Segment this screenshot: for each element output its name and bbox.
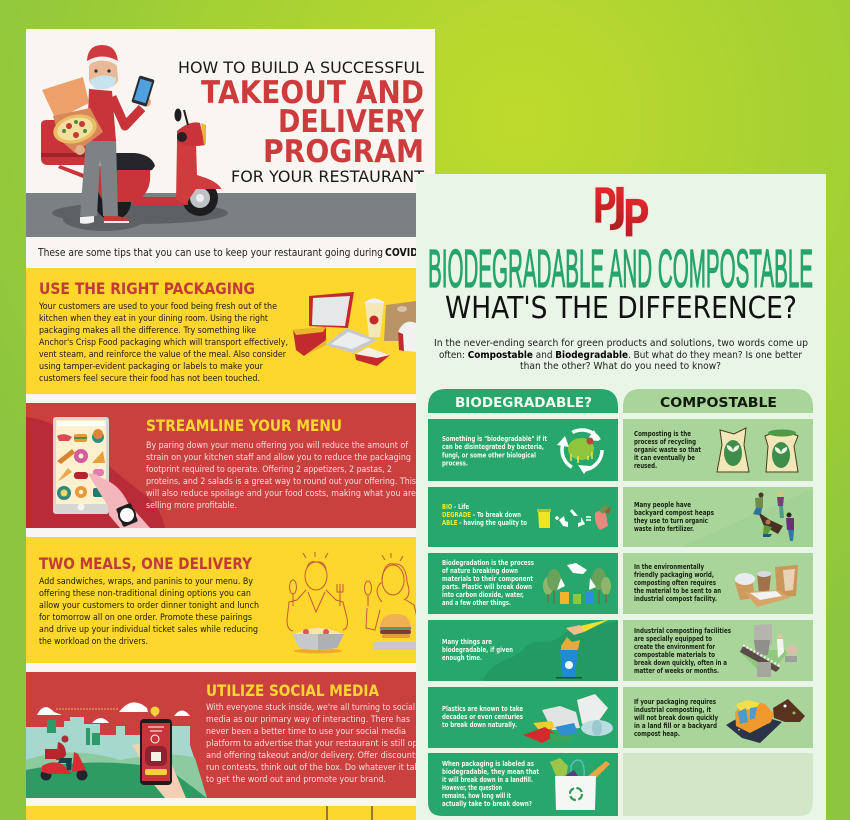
hand and phone xyxy=(132,719,186,798)
text: friendly packaging world, xyxy=(634,570,714,579)
text: decades or even centuries xyxy=(442,712,523,721)
body text: using tamper-evident packaging or labels to make your xyxy=(39,362,263,372)
body text xyxy=(38,302,288,384)
column header: compostable xyxy=(623,389,813,413)
body text: With everyone stuck inside, we're all turning to social xyxy=(206,703,415,713)
intro text: than the other? What do you need to know? xyxy=(520,361,721,372)
icon: reusable shopping bag xyxy=(550,758,610,810)
intro text: often: Compostable and Biodegradable. But what do they mean? Is one better xyxy=(439,350,803,361)
row: biodegradation process xyxy=(428,553,618,614)
title: takeout and delivery program: DELIVERY xyxy=(278,104,425,140)
text: actually take to break down? xyxy=(442,799,532,808)
text: and a few other things. xyxy=(442,598,511,607)
text: can be disintegrated by bacteria, xyxy=(442,442,544,451)
row: plastics xyxy=(428,687,618,748)
body text: Anchor's Crisp Food packaging which will transport effectively, xyxy=(39,338,288,348)
text: reused. xyxy=(634,461,657,470)
text xyxy=(442,704,523,729)
body text: offering these non-traditional dining options you can xyxy=(39,589,251,599)
text: process. xyxy=(442,458,468,468)
body text: By paring down your menu offering you will reduce the amount of xyxy=(146,441,409,451)
body text: for tomorrow all on one order. Promote these pairings xyxy=(39,613,252,623)
text: to break down naturally. xyxy=(442,720,517,729)
text xyxy=(634,562,721,603)
text: compostable materials to xyxy=(634,650,715,659)
body text xyxy=(206,703,428,785)
body text: will also reduce spoilage and your food costs, making what you are xyxy=(146,489,416,499)
row: bio degrade able xyxy=(428,487,618,547)
text: industrial composting, it xyxy=(634,705,711,714)
subtitle: WHAT'S THE DIFFERENCE? xyxy=(445,291,797,326)
body text: the workload on the drivers. xyxy=(39,637,148,647)
text: it will break down in a landfill. xyxy=(442,775,533,784)
body text: strain on your kitchen staff and allow you to reduce the packaging xyxy=(146,453,411,463)
text: they use to turn organic xyxy=(634,516,708,525)
text: However, the question xyxy=(442,783,502,792)
row: empty compost cell xyxy=(623,753,813,816)
text: Composting is the xyxy=(634,429,691,438)
icon: compost factory machinery xyxy=(738,624,798,677)
panel: next tip, cut off xyxy=(26,806,435,820)
body text: vent steam, and reinforce the value of the meal. Also consider xyxy=(39,350,286,360)
body text xyxy=(39,577,259,647)
text: process of recycling xyxy=(634,437,696,446)
rider scooter xyxy=(40,736,88,780)
text: are specially equipped to xyxy=(634,634,712,643)
text: will not break down quickly xyxy=(634,713,718,722)
icon: kraft packaging xyxy=(735,565,798,607)
text: parts. Plastic will break down xyxy=(442,582,532,591)
text: organic waste so that xyxy=(634,445,701,454)
icon: recycling blob xyxy=(557,430,602,474)
text: Many people have xyxy=(634,500,691,509)
body text: and drive up your individual ticket sales while reducing xyxy=(39,625,258,635)
text: If your packaging requires xyxy=(634,697,716,706)
logo: PJP: J xyxy=(609,178,628,233)
text xyxy=(442,434,547,468)
text: fungi, or some other biological xyxy=(442,450,536,460)
title: takeout and delivery program: FOR YOUR RESTAURANT xyxy=(231,167,424,186)
text xyxy=(634,429,701,470)
intro text: In the never-ending search for green products and solutions, two words come up xyxy=(434,338,808,349)
column header: biodegradable xyxy=(428,389,618,413)
panel: streamline your menu xyxy=(26,403,435,528)
title: takeout and delivery program: TAKEOUT AND xyxy=(201,75,424,111)
text: Plastics are known to take xyxy=(442,704,523,713)
text xyxy=(634,500,714,533)
burger xyxy=(373,614,418,650)
text: compost heap. xyxy=(634,729,680,738)
body text xyxy=(146,441,416,511)
intro sentence: These are some tips that you can use to keep your restaurant going during xyxy=(37,247,383,259)
illustration: delivery rider with scooter and pizza xyxy=(41,45,228,231)
illustration: hungry diners with bowl and burger xyxy=(287,552,419,654)
text: in a land fill or a backyard xyxy=(634,721,717,730)
row: many things biodegrade xyxy=(428,620,618,681)
rider xyxy=(80,45,155,224)
heading: USE THE RIGHT PACKAGING xyxy=(39,279,255,298)
heading: STREAMLINE YOUR MENU xyxy=(146,416,342,435)
row: backyard compost xyxy=(623,487,813,547)
row: what biodegradable means xyxy=(428,419,618,481)
text: In the environmentally xyxy=(634,562,704,571)
text: Industrial composting facilities xyxy=(634,626,731,635)
text: waste into fertilizer. xyxy=(634,524,694,533)
body text: to get the word out and promote your brand. xyxy=(206,775,386,785)
column header: compostable: COMPOSTABLE xyxy=(660,395,777,411)
text: remains, how long will it xyxy=(442,791,511,800)
body text: Add sandwiches, wraps, and paninis to your menu. By xyxy=(39,577,254,587)
panel: use the right packaging xyxy=(26,268,435,394)
body text: platform to advertise that your restaurant is still open xyxy=(206,739,428,749)
text: matter of weeks or months. xyxy=(634,666,719,675)
text: BIO - Life xyxy=(442,502,469,511)
text: composting often requires xyxy=(634,578,716,587)
text xyxy=(442,637,513,662)
text xyxy=(442,759,539,808)
illustration: tablet menu with hand xyxy=(53,417,150,528)
text: industrial compost facility. xyxy=(634,594,717,603)
icon: plastic waste pile xyxy=(523,694,613,743)
illustration: city and phone delivery order xyxy=(26,702,207,798)
icon: compost bags xyxy=(717,428,798,472)
body text: selling more profitable. xyxy=(146,501,237,511)
body text: and offering takeout and/or delivery. Offer discounts, xyxy=(206,751,422,761)
text xyxy=(634,697,718,738)
logo: PJP xyxy=(592,178,650,250)
icon: bin plus recycling equals compost xyxy=(537,504,611,530)
body text: run contests, think out of the box. Do whatever it takes xyxy=(206,763,428,773)
text xyxy=(634,626,731,675)
row: composting process xyxy=(623,419,813,481)
logo: PJP: P xyxy=(592,178,617,235)
text xyxy=(442,558,534,607)
text: Many things are xyxy=(442,637,492,646)
icon: yellow compost bulldozer xyxy=(726,699,805,743)
illustration: food packaging xyxy=(293,292,416,366)
text: the material to be sent to an xyxy=(634,586,721,595)
scooter xyxy=(41,108,222,220)
icon: recycling with bins and trees xyxy=(543,563,611,604)
body text: kitchen when they eat in your dining room. Using the right xyxy=(39,314,268,324)
text: biodegradable, they mean that xyxy=(442,767,539,776)
text: of nature breaking down xyxy=(442,566,518,575)
icon: hand dropping waste into bin xyxy=(556,620,608,678)
text: Biodegradation is the process xyxy=(442,558,534,567)
icon: people gardening xyxy=(753,492,794,541)
body text: never been a better time to use your social media xyxy=(206,727,406,737)
intro sentence: COVID-19 xyxy=(385,247,435,259)
title: takeout and delivery program: PROGRAM xyxy=(263,134,424,170)
text: When packaging is labeled as xyxy=(442,759,534,768)
text: DEGRADE - To break down xyxy=(442,510,521,519)
row: industrial composting facilities xyxy=(623,620,813,681)
text: it can eventually be xyxy=(634,453,695,462)
panel: biodegradable vs compostable infographic xyxy=(416,174,826,820)
text: into carbon dioxide, water, xyxy=(442,590,524,599)
panel: utilize social media xyxy=(26,672,435,798)
panel: takeout and delivery infographic xyxy=(26,29,435,820)
body text: Your customers are used to your food being fresh out of the xyxy=(38,302,277,312)
body text: customers feel secure their food has not been touched. xyxy=(39,374,260,384)
logo: PJP: P xyxy=(622,189,650,250)
column header: biodegradable: BIODEGRADABLE? xyxy=(455,395,592,411)
text: enough time. xyxy=(442,653,482,662)
bowl of pasta xyxy=(292,628,344,654)
body text: proteins, and 2 salads is a great way to round out your offering. This xyxy=(146,477,416,487)
row: industrial compost facility need xyxy=(623,553,813,614)
text: ABLE - having the quality to xyxy=(442,518,527,527)
body text: allow your customers to order dinner tonight and lunch xyxy=(39,601,259,611)
text: Something is "biodegradable" if it xyxy=(442,434,547,443)
panel: two meals, one delivery xyxy=(26,537,435,663)
heading: TWO MEALS, ONE DELIVERY xyxy=(39,554,252,573)
heading: UTILIZE SOCIAL MEDIA xyxy=(206,681,380,700)
body text: media as our primary way of interacting. There has xyxy=(206,715,410,725)
intro text xyxy=(434,338,808,372)
text: backyard compost heaps xyxy=(634,508,714,517)
text: break down quickly, often in a xyxy=(634,658,727,667)
pizza box xyxy=(42,77,103,155)
text: materials to their component xyxy=(442,574,533,583)
text: create the environment for xyxy=(634,642,715,651)
row: labeled biodegradable packaging xyxy=(428,753,618,816)
text: biodegradable, if given xyxy=(442,645,513,654)
body text: packaging makes all the difference. Try something like xyxy=(39,326,256,336)
text xyxy=(442,502,527,527)
body text: footprint required to operate. Offering 2 appetizers, 2 pastas, 2 xyxy=(146,465,392,475)
row: not backyard compost xyxy=(623,687,813,748)
title: takeout and delivery program: HOW TO BUILD A SUCCESSFUL xyxy=(178,58,424,77)
title: takeout and delivery program xyxy=(178,58,425,186)
